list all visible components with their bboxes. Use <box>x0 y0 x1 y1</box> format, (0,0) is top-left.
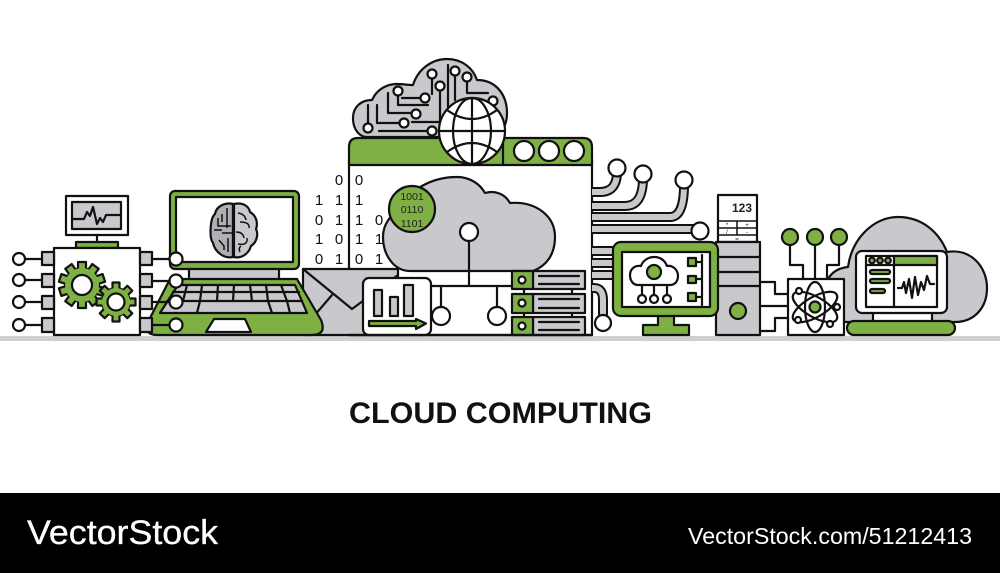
panel: atom box <box>760 229 847 335</box>
calculator: * <box>726 223 729 229</box>
panel: data tubes <box>592 160 708 331</box>
top cloud with circuit <box>353 59 507 137</box>
binary digits: 1 <box>335 251 343 268</box>
connector lines <box>760 245 839 331</box>
icon: small gear <box>96 282 136 322</box>
data bubble: 0110 <box>401 204 423 216</box>
laptop base <box>147 279 323 335</box>
calculator: = <box>735 237 739 243</box>
panel: right cloud laptop <box>828 217 987 335</box>
panel: desktop monitor <box>613 242 718 335</box>
small laptop screen <box>856 251 947 313</box>
panel: calculator and tower <box>716 195 760 335</box>
binary digits: 1 <box>355 212 363 229</box>
calculator: - <box>746 230 748 236</box>
monitor stand <box>643 314 689 335</box>
laptop screen <box>170 191 299 269</box>
calculator: 123 <box>732 201 752 215</box>
icon: brain <box>211 204 257 257</box>
data bubble: 1101 <box>401 218 423 230</box>
icon: large gear <box>59 262 105 308</box>
dashboard window <box>866 256 937 307</box>
binary digits: 1 <box>335 192 343 209</box>
icon: globe <box>439 98 505 164</box>
right cloud <box>828 217 987 322</box>
computer tower <box>716 242 760 335</box>
binary digits: 1 <box>355 192 363 209</box>
binary digits: 0 <box>375 212 383 229</box>
title: CLOUD COMPUTING <box>349 397 652 430</box>
panel: laptop with brain <box>147 191 323 335</box>
bar chart card <box>363 278 431 335</box>
binary digits: 0 <box>335 172 343 189</box>
chip pins and connector nodes <box>13 252 182 332</box>
icon: atom <box>788 282 842 332</box>
binary digits: 0 <box>315 251 323 268</box>
data bubble: 1001 <box>400 191 424 203</box>
keyboard <box>160 285 307 313</box>
binary digits: 1 <box>375 231 383 248</box>
hierarchy diagram <box>688 255 702 305</box>
binary digits <box>315 172 383 268</box>
green nodes <box>782 229 847 245</box>
calculator: + <box>745 223 749 229</box>
binary digits: 1 <box>315 192 323 209</box>
monitor frame <box>613 242 718 316</box>
laptop hinge <box>189 267 279 280</box>
trackpad <box>206 319 251 332</box>
panel: gear chip with monitor <box>13 196 182 335</box>
small laptop base <box>847 321 955 335</box>
atom box <box>788 279 844 335</box>
binary digits: 1 <box>375 251 383 268</box>
binary digits: 0 <box>315 212 323 229</box>
binary digits: 1 <box>315 231 323 248</box>
window body <box>349 160 592 335</box>
calculator: / <box>726 230 728 236</box>
footer image id: VectorStock.com/51212413 <box>688 523 972 549</box>
server stack <box>512 271 585 335</box>
chip body <box>54 248 140 335</box>
footer bar <box>0 493 1000 573</box>
binary digits: 1 <box>335 212 343 229</box>
binary digits: 1 <box>355 231 363 248</box>
icon: cloud network <box>630 257 678 303</box>
binary digits: 0 <box>335 231 343 248</box>
icon: small monitor with pulse <box>66 196 128 248</box>
binary digits: 0 <box>355 251 363 268</box>
small laptop neck <box>873 311 932 322</box>
network nodes <box>432 223 512 325</box>
window header <box>349 138 592 165</box>
envelope <box>303 269 398 335</box>
footer brand: VectorStock <box>27 514 219 552</box>
panel: browser window <box>303 59 592 335</box>
calculator <box>718 195 757 243</box>
main cloud <box>383 177 555 271</box>
data bubble <box>389 186 435 232</box>
monitor screen <box>622 252 710 307</box>
binary digits: 0 <box>355 172 363 189</box>
